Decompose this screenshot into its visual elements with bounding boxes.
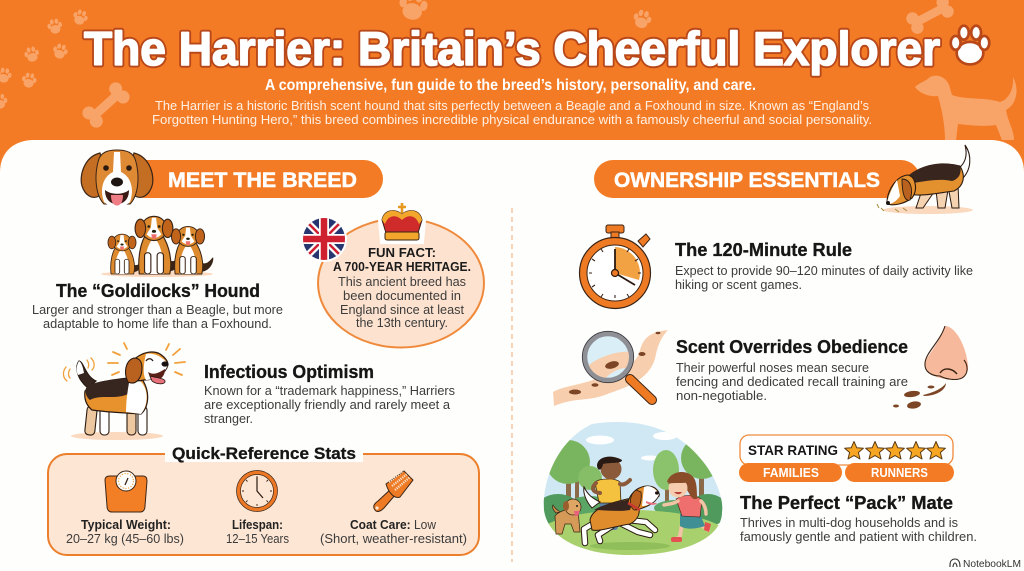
stat: typical weight — [66, 518, 184, 546]
stat: coat care: Coat Care: Low — [350, 518, 437, 532]
text block: goldilocks hound — [32, 280, 283, 331]
white content panel — [0, 140, 1024, 571]
icon: happy beagle — [63, 343, 185, 440]
text block: scent overrides obedience: Their powerful noses mean secure — [676, 360, 869, 375]
boy — [593, 457, 630, 530]
text block: goldilocks hound: The “Goldilocks” Hound — [56, 280, 260, 301]
icon: crown — [380, 203, 424, 242]
icon: title paw — [951, 26, 989, 64]
text block: goldilocks hound: Larger and stronger than a Beagle, but more — [32, 302, 283, 317]
callout: fun fact — [301, 203, 484, 348]
intro text — [152, 98, 872, 127]
text block: perfect pack mate: Thrives in multi-dog households and is — [740, 515, 958, 530]
icon: grooming brush — [374, 471, 413, 511]
callout: fun fact: been documented in — [343, 288, 461, 303]
tag: runners: RUNNERS — [871, 466, 928, 480]
text block: perfect pack mate: The Perfect “Pack” Mate — [740, 492, 953, 513]
intro text: Forgotten Hunting Hero,” this breed combines incredible physical endurance with a famously cheerful and social personality. — [152, 112, 872, 127]
heading: meet the breed — [81, 150, 383, 209]
illustration: children and dogs playing in park — [544, 422, 722, 555]
text block: 120-minute rule: hiking or scent games. — [675, 277, 802, 292]
heading: meet the breed: MEET THE BREED — [168, 169, 357, 192]
header decorations: paws, bones and dog silhouette — [0, 0, 1017, 140]
panel: quick-reference stats — [48, 444, 479, 555]
heading: ownership essentials — [594, 145, 973, 214]
stat: typical weight: Typical Weight: — [81, 518, 171, 532]
text block: infectious optimism: Known for a “trademark happiness,” Harriers — [204, 383, 455, 398]
girl — [664, 472, 711, 542]
stat: coat care — [320, 518, 467, 546]
tag: runners — [845, 463, 954, 482]
stat: coat care: (Short, weather-resistant) — [320, 531, 467, 546]
text block: scent overrides obedience: non-negotiable. — [676, 388, 767, 403]
puppy — [553, 499, 581, 534]
icon: beagle face — [81, 150, 153, 209]
icon: three hounds — [101, 216, 213, 277]
text block: infectious optimism — [204, 361, 455, 426]
section divider — [511, 208, 513, 562]
icon: nose with scent particles — [893, 326, 968, 410]
stat: lifespan: Lifespan: — [232, 518, 283, 532]
text block: perfect pack mate: famously gentle and patient with children. — [740, 529, 977, 544]
text block: scent overrides obedience — [676, 336, 908, 403]
subtitle: A comprehensive, fun guide to the breed’s history, personality, and care. — [265, 77, 756, 94]
text block: infectious optimism: stranger. — [204, 411, 253, 426]
big dog — [584, 486, 659, 543]
panel: quick-reference stats: Quick-Reference Stats — [172, 444, 356, 463]
text block: infectious optimism: Infectious Optimism — [204, 361, 374, 382]
text block: scent overrides obedience: Scent Overrides Obedience — [676, 336, 908, 357]
text block: infectious optimism: are exceptionally friendly and rarely meet a — [204, 397, 451, 412]
icon: clock — [236, 470, 278, 512]
text block: perfect pack mate — [740, 492, 977, 544]
icon: five stars — [845, 442, 945, 459]
title: The Harrier: Britain’s Cheerful Explorer — [84, 22, 940, 75]
panel: star rating — [739, 435, 954, 482]
callout: fun fact: England since at least — [340, 302, 464, 317]
stat: lifespan — [226, 518, 289, 546]
tag: families: FAMILIES — [763, 466, 819, 480]
text block: 120-minute rule — [675, 239, 973, 292]
notebooklm credit: NotebookLM — [963, 558, 1021, 570]
icon: union flag — [301, 216, 347, 262]
callout: fun fact: A 700-YEAR HERITAGE. — [333, 260, 471, 274]
stat: typical weight: 20–27 kg (45–60 lbs) — [66, 531, 184, 546]
icon: sniffing beagle — [877, 145, 973, 214]
text block: 120-minute rule: Expect to provide 90–120 minutes of daily activity like — [675, 263, 973, 278]
text block: 120-minute rule: The 120-Minute Rule — [675, 239, 852, 260]
panel: star rating: STAR RATING — [748, 442, 838, 458]
callout: fun fact: the 13th century. — [356, 315, 448, 330]
icon: weighing scale — [105, 471, 147, 512]
icon: stopwatch — [580, 225, 650, 308]
icon: magnifier on scent trail — [553, 330, 668, 406]
text block: scent overrides obedience: fencing and dedicated recall training are — [676, 374, 908, 389]
stat: lifespan: 12–15 Years — [226, 531, 289, 546]
title: The Harrier: Britain’s Cheerful Explorer — [84, 22, 940, 75]
callout: fun fact: FUN FACT: — [368, 246, 436, 260]
heading: ownership essentials: OWNERSHIP ESSENTIALS — [614, 169, 880, 192]
tag: families — [739, 463, 842, 482]
callout: fun fact: This ancient breed has — [338, 274, 466, 289]
intro text: The Harrier is a historic British scent hound that sits perfectly between a Beagle and a Foxhound in size. Known as “England’s — [155, 98, 869, 113]
text block: goldilocks hound: adaptable to home life than a Foxhound. — [43, 316, 272, 331]
